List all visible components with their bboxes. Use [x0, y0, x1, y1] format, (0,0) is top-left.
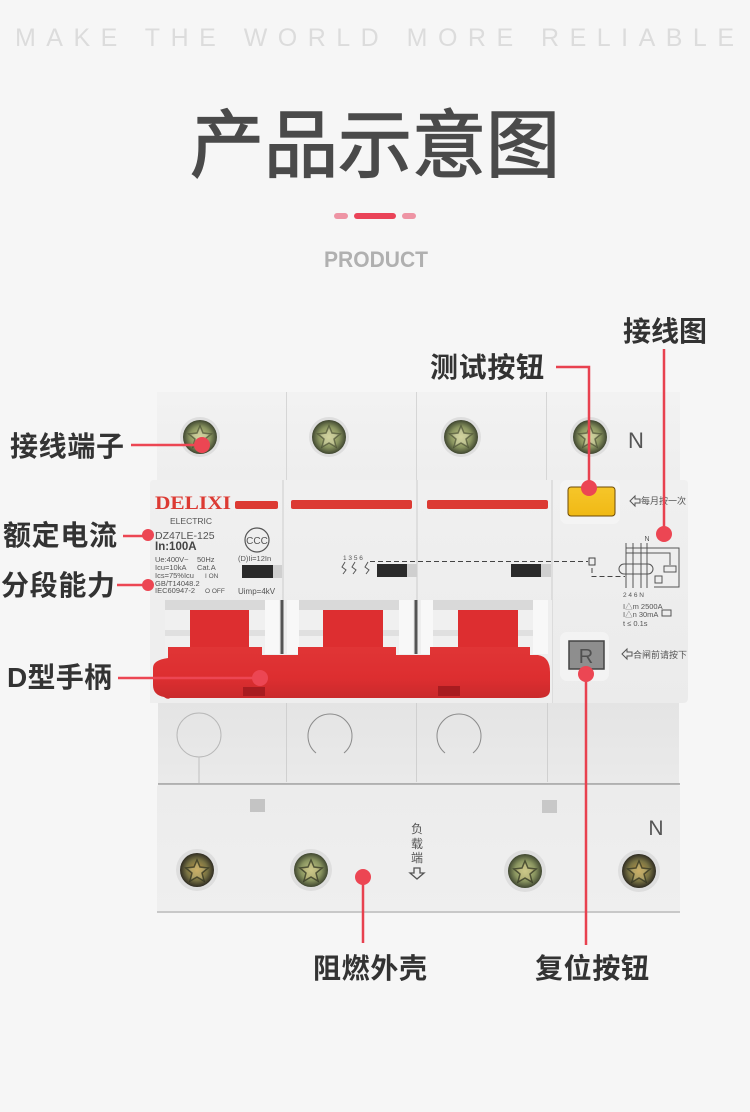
upper terminal block: N: [628, 428, 644, 453]
callout: 阻燃外壳: 阻燃外壳: [313, 953, 427, 984]
pole symbols and indicators: [342, 555, 625, 577]
lower terminal cover: 端: [411, 851, 423, 865]
label plate: brand and ratings: 50Hz: [197, 555, 215, 564]
circuit breaker product: [150, 392, 688, 912]
pole symbols and indicators: 1 3 5 6: [343, 555, 363, 562]
reset button: [560, 632, 609, 681]
lower terminal cover: 负: [411, 822, 423, 836]
callout: 接线图: 接线图: [623, 316, 707, 347]
wiring diagram: 2 4 6 N: [623, 592, 644, 599]
wiring diagram: I△m 2500A: [623, 602, 663, 611]
label plate: brand and ratings: DZ47LE-125: [155, 530, 215, 542]
lower terminal cover: N: [648, 817, 664, 840]
RCD panel texts: 合闸前请按下: [633, 649, 687, 660]
main housing: [150, 480, 688, 703]
label plate: brand and ratings: CCC: [246, 536, 268, 547]
callout: 测试按钮: 测试按钮: [430, 352, 544, 383]
label plate: brand and ratings: [155, 494, 282, 596]
callout: 阻燃外壳: [313, 869, 427, 984]
RCD panel texts: [622, 495, 687, 660]
callout: 复位按钮: 复位按钮: [535, 952, 649, 984]
callout: 接线图: [623, 316, 707, 542]
callout: 接线端子: 接线端子: [10, 431, 124, 462]
subtitle: PRODUCT: [324, 247, 429, 272]
wiring diagram: N: [644, 536, 650, 543]
label plate: brand and ratings: I ON: [205, 573, 219, 580]
label plate: brand and ratings: ELECTRIC: [170, 516, 212, 526]
title: 产品示意图: [190, 104, 560, 187]
label plate: brand and ratings: Icu=10kA: [155, 563, 186, 572]
callout: 复位按钮: [535, 666, 649, 984]
label plate: brand and ratings: Cat.A: [197, 563, 216, 572]
upper terminal block: [157, 392, 680, 482]
red handle bar: [153, 647, 550, 699]
label plate: brand and ratings: Ics=75%Icu: [155, 571, 194, 580]
label plate: brand and ratings: O OFF: [205, 588, 225, 595]
RCD panel texts: 每月按一次: [641, 495, 686, 506]
label plate: brand and ratings: IEC60947-2: [155, 586, 195, 595]
callout: 接线端子: [10, 431, 210, 462]
label plate: brand and ratings: (D)Ii=12In: [238, 554, 271, 563]
label plate: brand and ratings: Uimp=4kV: [238, 587, 276, 596]
callout: D型手柄: [7, 662, 268, 693]
callout: 分段能力: 分段能力: [1, 570, 115, 601]
lower terminal cover: [157, 785, 680, 912]
callout: 额定电流: 额定电流: [3, 520, 117, 551]
red stripes on poles: [291, 500, 548, 509]
slogan: MAKE THE WORLD MORE RELIABLE: [15, 24, 734, 52]
test button: [560, 480, 620, 524]
title ornament: [334, 213, 416, 219]
label plate: brand and ratings: Ue:400V~: [155, 555, 189, 564]
wiring diagram: t ≤ 0.1s: [623, 619, 648, 628]
wiring diagram: [619, 536, 679, 628]
lower section behind: [158, 700, 680, 784]
label plate: brand and ratings: In:100A: [155, 541, 197, 553]
wiring diagram: I△n 30mA: [623, 610, 658, 619]
lower terminal cover: 载: [411, 837, 423, 851]
label plate: brand and ratings: GB/T14048.2: [155, 579, 200, 588]
label plate: brand and ratings: DELIXI: [155, 494, 231, 514]
callout: 测试按钮: [430, 352, 597, 496]
handle windows: [165, 600, 548, 660]
callout: D型手柄: D型手柄: [7, 662, 112, 693]
reset button: R: [579, 646, 593, 668]
